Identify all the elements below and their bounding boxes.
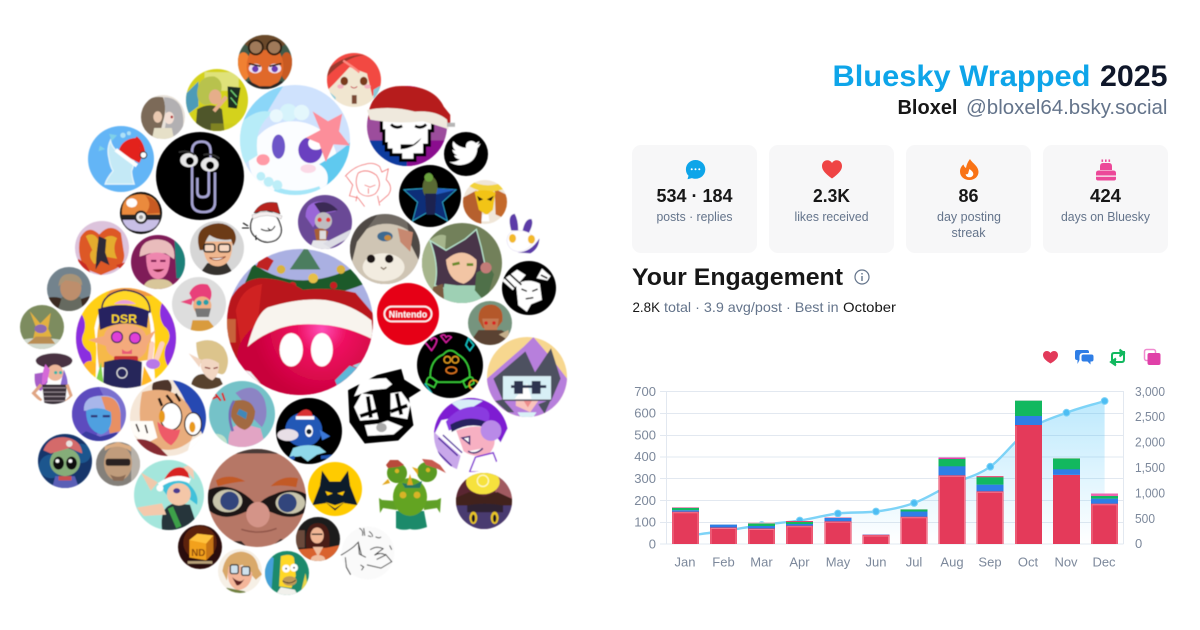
stat value: 2.3K bbox=[813, 186, 850, 206]
avatar: purple inkling drawing bbox=[434, 398, 508, 472]
right axis labels: 2,000 bbox=[1135, 434, 1165, 450]
avatar: sketch skull face bbox=[348, 369, 421, 443]
right axis labels: 1,000 bbox=[1135, 486, 1165, 500]
avatar: nintendo logo on red: Nintendo bbox=[389, 310, 428, 320]
display name: Bloxel bbox=[898, 97, 958, 119]
icon: replies legend bbox=[1075, 350, 1094, 364]
avatar: blue-orange painted face bbox=[72, 387, 126, 441]
title year: 2025 bbox=[1100, 60, 1168, 93]
x axis labels: Nov bbox=[1054, 554, 1078, 570]
bar: Jun bbox=[862, 534, 890, 544]
x axis labels: Feb bbox=[712, 554, 735, 570]
engagement summary: October bbox=[843, 299, 896, 315]
icon: quotes legend bbox=[1144, 350, 1160, 365]
avatar: blond elf bbox=[189, 340, 234, 390]
left axis labels: 600 bbox=[634, 406, 656, 420]
header bbox=[832, 60, 1168, 119]
avatar: painted character with purple hair bbox=[209, 381, 275, 447]
avatar: brown-haired man with red eyes bbox=[468, 301, 512, 345]
right axis labels: 0 bbox=[1135, 536, 1142, 551]
engagement summary: 2.8K bbox=[632, 299, 661, 315]
cumulative area bbox=[686, 401, 1105, 544]
stat value: 424 bbox=[1090, 186, 1121, 206]
avatar: fiery phoenix art bbox=[75, 221, 129, 275]
stat label: days on Bluesky bbox=[1061, 209, 1150, 224]
title: Bluesky Wrapped bbox=[832, 60, 1090, 93]
avatar: orange ND cube: ND bbox=[191, 547, 206, 559]
avatar: orange ND cube bbox=[178, 525, 222, 569]
avatar: purple background character with gray mask bbox=[298, 195, 352, 249]
x axis labels: Sep bbox=[978, 554, 1002, 570]
avatar: two gray-haired characters bbox=[141, 95, 185, 139]
x axis labels: May bbox=[826, 554, 851, 570]
cumulative line bbox=[686, 401, 1105, 536]
bar: Mar bbox=[748, 522, 775, 544]
avatar: green-clad catgirl bbox=[422, 223, 502, 303]
icon: info bbox=[855, 270, 869, 284]
bar: Jul bbox=[900, 509, 928, 544]
chart legend icons bbox=[1043, 350, 1160, 366]
stat value: 534 · 184 bbox=[656, 186, 732, 206]
avatar: main profile, mouse-eared red ball with santa hat bbox=[227, 246, 377, 404]
icon: likes legend bbox=[1043, 351, 1058, 364]
avatar: geometric purple character with glasses bbox=[487, 337, 567, 417]
avatar cluster bbox=[20, 29, 567, 595]
avatar: owl with lamp bbox=[456, 470, 512, 529]
icon: chat bubble bbox=[686, 160, 705, 179]
avatar: hand-drawn bunny sketch bbox=[341, 527, 394, 579]
avatar: pink-haired inkling with mask bbox=[172, 277, 226, 331]
avatar: lynx character bbox=[20, 305, 64, 349]
avatar: star character on black bbox=[399, 165, 461, 227]
left axis labels: 700 bbox=[634, 384, 656, 399]
avatar: popplio with santa hat on black bbox=[276, 398, 342, 464]
avatar: smiling man with glasses bbox=[190, 221, 244, 275]
avatar: neon green character on black bbox=[417, 332, 483, 398]
avatar: teal inkling with santa hat bbox=[134, 460, 204, 530]
stat label: posts · replies bbox=[656, 209, 733, 224]
avatar: nintendo logo on red bbox=[377, 283, 439, 345]
avatar: green cactus plush bbox=[379, 459, 446, 530]
avatar: glove with santa hat bbox=[88, 126, 154, 192]
engagement summary bbox=[632, 299, 896, 315]
avatar: man in gray jacket bbox=[47, 267, 91, 311]
avatar: green alien in mario hat bbox=[38, 434, 92, 488]
bar: Sep bbox=[976, 476, 1004, 544]
left axis labels: 200 bbox=[634, 493, 656, 508]
avatar: yellow-green inkling bbox=[186, 69, 248, 131]
x axis labels: Apr bbox=[789, 554, 810, 570]
x axis labels: Jan bbox=[675, 554, 695, 570]
stat cards bbox=[632, 145, 1168, 253]
panel: day posting streak bbox=[906, 145, 1031, 253]
avatar: white bunny with santa hat sketch bbox=[242, 202, 282, 242]
left axis labels bbox=[634, 384, 656, 552]
right axis labels: 1,500 bbox=[1135, 460, 1165, 475]
bar: Aug bbox=[938, 458, 966, 544]
avatar: twitter bird on black bbox=[444, 132, 488, 176]
left axis labels: 400 bbox=[634, 449, 656, 464]
stat value: 86 bbox=[958, 186, 978, 206]
avatar: orange monster with yellow mouth bbox=[463, 180, 507, 224]
engagement heading bbox=[632, 264, 869, 291]
combo chart: monthly engagement bbox=[634, 384, 1165, 570]
bar: May bbox=[824, 517, 852, 544]
avatar: woman with dark hair bbox=[296, 517, 340, 564]
right axis labels: 500 bbox=[1135, 511, 1155, 526]
avatar: clippy paperclip on black bbox=[156, 132, 244, 220]
grid bbox=[660, 391, 1124, 544]
panel: posts and replies bbox=[632, 145, 757, 253]
bar: Feb bbox=[710, 524, 737, 544]
engagement summary: total · 3.9 avg/post · Best in bbox=[664, 299, 839, 315]
bar: Nov bbox=[1053, 458, 1080, 544]
right axis labels bbox=[1135, 384, 1165, 551]
avatar: girl with striped shirt bbox=[31, 352, 74, 405]
avatar: red hair chibi face bbox=[327, 53, 381, 107]
left axis labels: 300 bbox=[634, 471, 656, 486]
cumulative points bbox=[758, 398, 1108, 528]
x axis labels: Oct bbox=[1018, 554, 1038, 570]
stat label: likes received bbox=[794, 209, 868, 224]
avatar: yellow circle with black fox bbox=[308, 462, 362, 516]
avatar: inkling close-up with mask bbox=[208, 449, 306, 547]
panel: days on Bluesky bbox=[1043, 145, 1168, 253]
avatar: black white lineart hair bbox=[502, 261, 556, 315]
handle: @bloxel64.bsky.social bbox=[966, 97, 1168, 119]
panel: likes received bbox=[769, 145, 894, 253]
avatar: red line sketch bbox=[345, 163, 391, 207]
left axis labels: 500 bbox=[634, 428, 656, 442]
icon: heart bbox=[822, 160, 842, 178]
icon: flame bbox=[960, 159, 978, 180]
avatar: cartoon tiger face bbox=[130, 378, 206, 456]
bar: Oct bbox=[1015, 400, 1042, 544]
right axis labels: 3,000 bbox=[1135, 384, 1165, 399]
icon: birthday cake bbox=[1096, 160, 1116, 180]
heading text: Your Engagement bbox=[632, 264, 843, 291]
bar: Dec bbox=[1091, 494, 1118, 544]
left axis labels: 100 bbox=[634, 514, 656, 530]
avatar: white-blue pony with pink star bbox=[240, 85, 350, 198]
avatar: blond character with glasses bbox=[218, 549, 262, 593]
x axis labels: Dec bbox=[1092, 554, 1116, 570]
stat label: day posting bbox=[937, 209, 1001, 224]
avatar: kitten face bbox=[350, 214, 421, 285]
x axis labels: Jun bbox=[866, 554, 886, 570]
stat label line 2: streak bbox=[952, 225, 986, 240]
avatar: purple white bunny bbox=[506, 213, 540, 254]
avatar: pixel face in santa hat on bi flag bbox=[367, 86, 455, 166]
bar: Jan bbox=[672, 507, 699, 544]
stacked bars bbox=[672, 400, 1118, 544]
x axis labels: Jul bbox=[906, 554, 922, 570]
avatar: blurry man in sunglasses bbox=[96, 442, 140, 486]
avatar: inkling with DSR beanie bbox=[76, 288, 176, 388]
avatar: orange inkling with goggles bbox=[236, 29, 293, 89]
avatar: pokeball bbox=[120, 192, 162, 234]
right axis labels: 2,500 bbox=[1135, 409, 1165, 424]
x axis labels bbox=[675, 554, 1116, 570]
avatar: homer on green bbox=[265, 551, 309, 595]
avatar: inkling with DSR beanie: DSR bbox=[111, 312, 137, 326]
icon: reposts legend bbox=[1111, 350, 1124, 366]
left axis labels: 0 bbox=[649, 536, 656, 552]
x axis labels: Aug bbox=[940, 554, 964, 570]
avatar: pink-haired character on magenta bbox=[131, 235, 185, 289]
bar: Apr bbox=[786, 521, 813, 544]
x axis labels: Mar bbox=[750, 554, 773, 570]
